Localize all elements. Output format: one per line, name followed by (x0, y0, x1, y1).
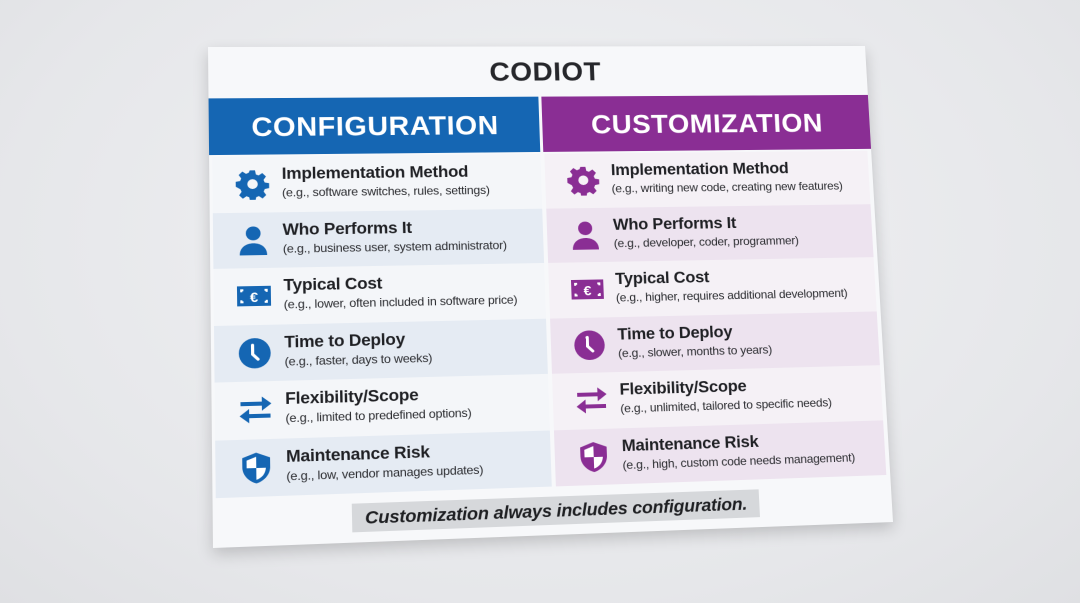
card (208, 46, 893, 548)
header: customization: CUSTOMIZATION (591, 108, 824, 139)
row: flexibility: Flexibility/Scope (285, 386, 419, 408)
row: implementation method: Implementation Method (611, 160, 789, 179)
row: time to deploy: (e.g., faster, days to weeks) (284, 350, 432, 368)
footer callout: Customization always includes configuration. (365, 494, 747, 528)
row: typical cost: Typical Cost (615, 269, 710, 288)
row: flexibility (552, 365, 883, 430)
row: who performs it (546, 204, 874, 263)
title: CODIOT (489, 57, 602, 86)
row: time to deploy: Time to Deploy (284, 330, 405, 351)
row: time to deploy (550, 311, 880, 374)
row: implementation method (212, 154, 542, 213)
row: time to deploy: (e.g., slower, months to years) (618, 342, 772, 360)
row: typical cost: (e.g., lower, often included in software price) (284, 293, 517, 311)
header: configuration (209, 97, 540, 155)
row: flexibility: (e.g., limited to predefined options) (285, 406, 472, 425)
row: typical cost: (e.g., higher, requires additional development) (616, 286, 848, 304)
row: maintenance risk: (e.g., high, custom code needs management) (622, 450, 855, 472)
row: implementation method: (e.g., software switches, rules, settings) (282, 183, 490, 199)
row: implementation method: (e.g., writing new code, creating new features) (611, 179, 843, 195)
panel: configuration (213, 163, 552, 498)
row: time to deploy: Time to Deploy (617, 323, 733, 343)
row: implementation method: Implementation Method (282, 163, 468, 183)
row: time to deploy (214, 318, 548, 383)
row: typical cost: Typical Cost (283, 275, 382, 294)
row: maintenance risk (554, 420, 886, 486)
row: maintenance risk: Maintenance Risk (621, 433, 759, 455)
row: flexibility: (e.g., unlimited, tailored to specific needs) (620, 396, 832, 415)
row: typical cost (548, 257, 877, 318)
row: who performs it: (e.g., business user, system administrator) (283, 238, 507, 255)
row: typical cost: € (246, 286, 254, 301)
header: customization (541, 95, 871, 152)
panel: customization (546, 160, 886, 486)
row: who performs it: Who Performs It (613, 214, 737, 233)
row: maintenance risk: (e.g., low, vendor manages updates) (286, 462, 483, 483)
row: typical cost (213, 263, 546, 325)
row: who performs it: (e.g., developer, coder, programmer) (614, 233, 799, 250)
row: maintenance risk (215, 430, 552, 498)
header: configuration: CONFIGURATION (251, 110, 499, 142)
row: who performs it: Who Performs It (282, 219, 412, 238)
row: who performs it (213, 208, 544, 269)
row: maintenance risk: Maintenance Risk (286, 443, 430, 466)
row: flexibility (215, 374, 550, 440)
row: typical cost: € (589, 287, 597, 302)
row: implementation method (544, 151, 870, 208)
row: flexibility: Flexibility/Scope (619, 377, 747, 399)
